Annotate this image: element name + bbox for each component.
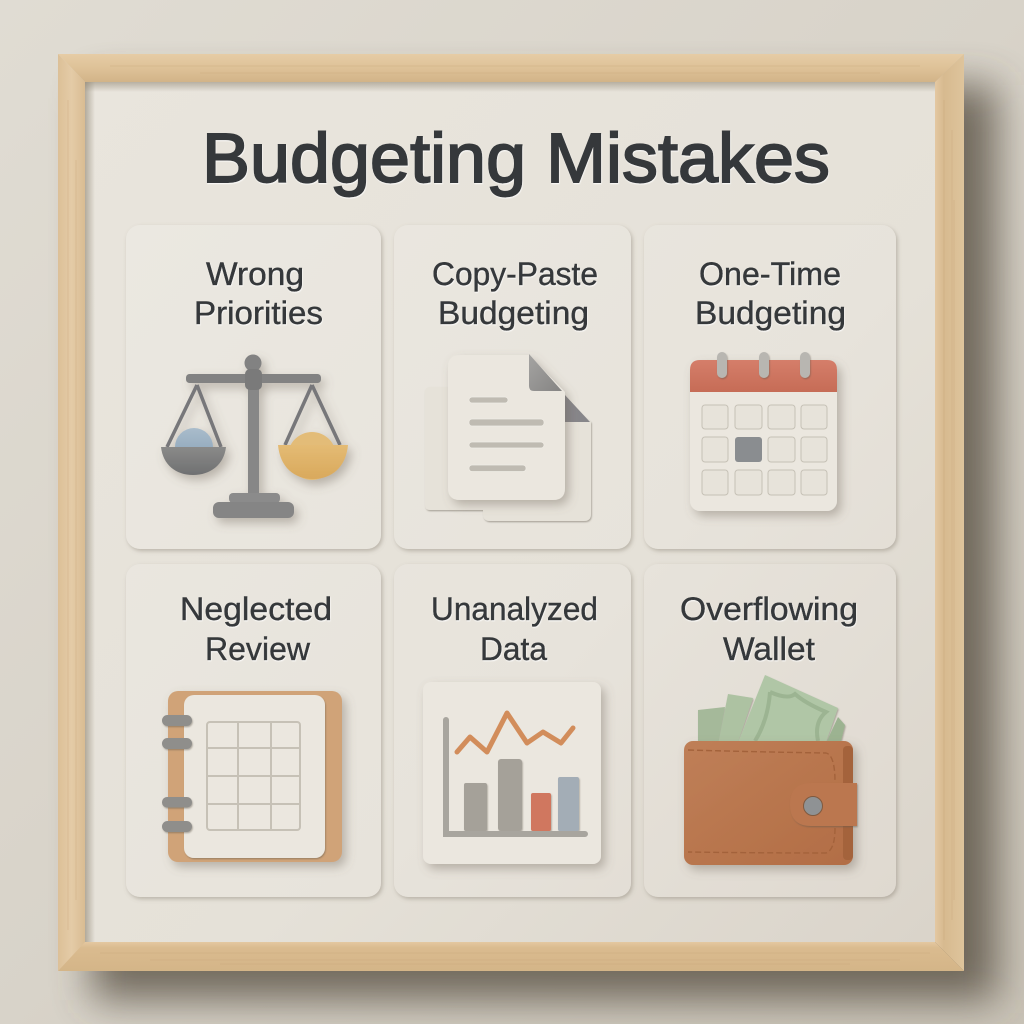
heading: overflowing wallet: Overflowing	[680, 591, 858, 627]
heading: unanalyzed data: Unanalyzed	[431, 591, 598, 627]
title: Budgeting Mistakes	[202, 119, 830, 197]
panel: unanalyzed data	[394, 564, 631, 897]
heading: unanalyzed data: Data	[480, 631, 547, 667]
picture frame	[58, 54, 964, 971]
heading: wrong priorities: Wrong	[206, 256, 304, 292]
heading: neglected review: Neglected	[180, 591, 332, 627]
icon: copied documents	[425, 354, 591, 521]
panel: one-time budgeting	[644, 225, 896, 549]
icon: balance scale	[161, 354, 348, 518]
heading: wrong priorities: Priorities	[194, 295, 323, 331]
icon: chart card	[423, 682, 601, 864]
heading: neglected review: Review	[205, 631, 311, 667]
icon: notebook	[162, 691, 342, 862]
heading: copy-paste budgeting: Copy-Paste	[432, 256, 598, 292]
panel: neglected review	[126, 564, 381, 897]
line chart	[457, 713, 573, 752]
heading: neglected review	[180, 591, 332, 667]
heading: one-time budgeting	[695, 256, 846, 331]
heading: overflowing wallet: Wallet	[723, 631, 815, 667]
heading: one-time budgeting: Budgeting	[695, 295, 846, 331]
bar chart	[464, 759, 579, 831]
heading: copy-paste budgeting: Budgeting	[438, 295, 589, 331]
heading: one-time budgeting: One-Time	[699, 256, 841, 292]
icon: wallet	[684, 675, 857, 865]
panel: overflowing wallet	[644, 564, 896, 897]
chart axes	[446, 720, 585, 834]
heading: unanalyzed data	[431, 591, 598, 667]
heading: overflowing wallet	[680, 591, 858, 667]
heading: copy-paste budgeting	[432, 256, 598, 331]
icon: calendar	[690, 352, 837, 511]
heading: wrong priorities	[194, 256, 323, 331]
panel: copy-paste budgeting	[394, 225, 631, 549]
panel: wrong priorities	[126, 225, 381, 549]
